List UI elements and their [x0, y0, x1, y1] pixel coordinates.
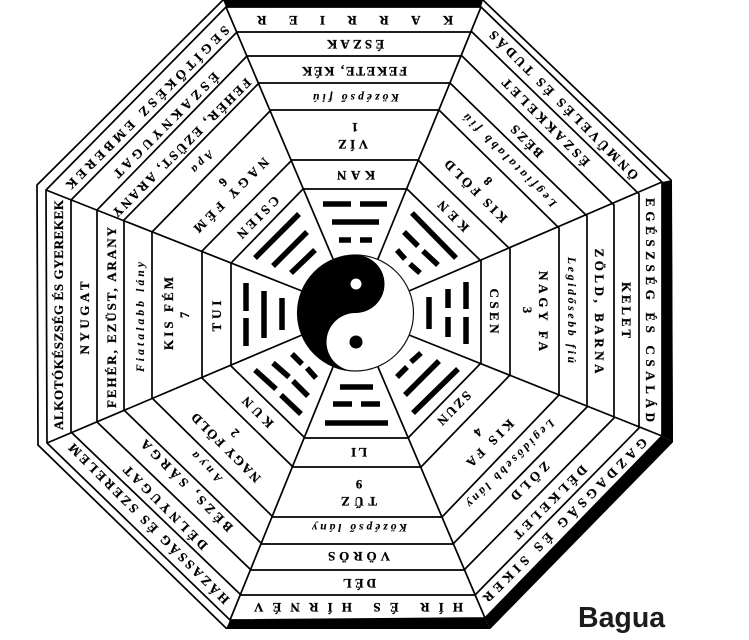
NAGY FÖLD: NAGY FÖLD: [188, 410, 263, 486]
VÍZ: VÍZ: [338, 137, 368, 152]
ÖNMŰVELÉS ÉS TUDÁS: ÖNMŰVELÉS ÉS TUDÁS: [486, 28, 641, 183]
Apa: Apa: [188, 147, 216, 175]
DÉLKELET: DÉLKELET: [510, 462, 590, 543]
Anya: Anya: [189, 449, 225, 485]
HÍR ÉS HÍRNÉV: HÍR ÉS HÍRNÉV: [253, 600, 463, 615]
CSEN: CSEN: [487, 288, 502, 334]
KEN: KEN: [434, 197, 472, 235]
trigram: LI: [325, 387, 388, 423]
8: 8: [481, 174, 495, 188]
DÉLNYUGAT: DÉLNYUGAT: [120, 462, 210, 553]
KARRIER: KARRIER: [256, 13, 453, 28]
panel: west sector labels: [51, 199, 224, 430]
KIS FÉM: KIS FÉM: [161, 277, 176, 350]
Fiatalabb lány: Fiatalabb lány: [135, 261, 147, 373]
DÉL: DÉL: [343, 576, 376, 591]
panel: south-east sector labels: [434, 388, 651, 606]
ZÖLD: ZÖLD: [508, 459, 553, 504]
ÉSZAKKELET: ÉSZAKKELET: [498, 75, 593, 169]
yin yang symbol: [298, 255, 414, 371]
LI: LI: [351, 445, 367, 460]
4: 4: [470, 425, 485, 440]
trigram: CSEN: [429, 282, 466, 344]
Legidősebb fiú: Legidősebb fiú: [565, 256, 577, 364]
BÉZS, SÁRGA: BÉZS, SÁRGA: [137, 436, 236, 535]
trigram: KAN: [323, 204, 387, 240]
TUI: TUI: [209, 300, 224, 332]
panel: north-east sector labels: [434, 28, 641, 235]
panel: east sector labels: [487, 198, 658, 422]
ÉSZAKNYUGAT: ÉSZAKNYUGAT: [110, 69, 222, 181]
7: 7: [178, 312, 192, 318]
trigram: TUI: [246, 283, 282, 346]
Legidősebb lány: Legidősebb lány: [463, 416, 557, 510]
TŰZ: TŰZ: [341, 494, 377, 509]
FEKETE, KÉK: FEKETE, KÉK: [301, 64, 407, 79]
trigrams: [246, 204, 466, 423]
panel: south sector labels: [253, 445, 463, 615]
panel: north-west sector labels: [62, 23, 283, 242]
ALKOTÓKÉSZSÉG ÉS GYEREKEK: ALKOTÓKÉSZSÉG ÉS GYEREKEK: [51, 199, 66, 430]
Középső lány: Középső lány: [311, 521, 408, 533]
NAGY FÉM: NAGY FÉM: [191, 155, 272, 236]
trigram: SZUN: [397, 353, 458, 413]
ZÖLD, BARNA: ZÖLD, BARNA: [592, 248, 607, 374]
Középső fiú: Középső fiú: [312, 91, 400, 103]
3: 3: [520, 307, 534, 313]
FEHÉR, EZÜST, ARANY: FEHÉR, EZÜST, ARANY: [109, 75, 254, 221]
NYUGAT: NYUGAT: [77, 281, 92, 354]
panel: north sector labels: [256, 13, 453, 183]
Legfiatalabb fiú: Legfiatalabb fiú: [460, 110, 560, 210]
CSIEN: CSIEN: [234, 193, 283, 242]
9: 9: [356, 477, 362, 491]
GAZDAGSÁG ÉS SIKER: GAZDAGSÁG ÉS SIKER: [480, 435, 651, 606]
trigram: CSIEN: [255, 214, 315, 273]
SZUN: SZUN: [434, 388, 475, 429]
KELET: KELET: [619, 282, 634, 338]
FEHÉR, EZÜST, ARANY: FEHÉR, EZÜST, ARANY: [104, 226, 119, 408]
SEGÍTŐKÉSZ EMBEREK: SEGÍTŐKÉSZ EMBEREK: [62, 23, 233, 193]
panel: south-west sector labels: [65, 393, 276, 607]
title: Bagua: Bagua: [578, 602, 666, 634]
KUN: KUN: [238, 393, 276, 431]
HÁZASSÁG ÉS SZERELEM: HÁZASSÁG ÉS SZERELEM: [65, 440, 232, 607]
BÉZS: BÉZS: [507, 122, 546, 161]
NAGY FA: NAGY FA: [536, 271, 551, 352]
1: 1: [352, 120, 358, 134]
trigram: KUN: [255, 354, 316, 414]
trigram: KEN: [397, 213, 456, 273]
6: 6: [216, 175, 230, 189]
VÖRÖS: VÖRÖS: [328, 549, 390, 564]
KIS FÖLD: KIS FÖLD: [441, 157, 510, 226]
KIS FA: KIS FA: [463, 416, 517, 471]
thick black edges of the octagon: [223, 0, 673, 629]
ÉSZAK: ÉSZAK: [326, 37, 384, 52]
EGÉSZSÉG ÉS CSALÁD: EGÉSZSÉG ÉS CSALÁD: [643, 198, 658, 422]
KAN: KAN: [336, 168, 375, 183]
2: 2: [228, 426, 242, 440]
